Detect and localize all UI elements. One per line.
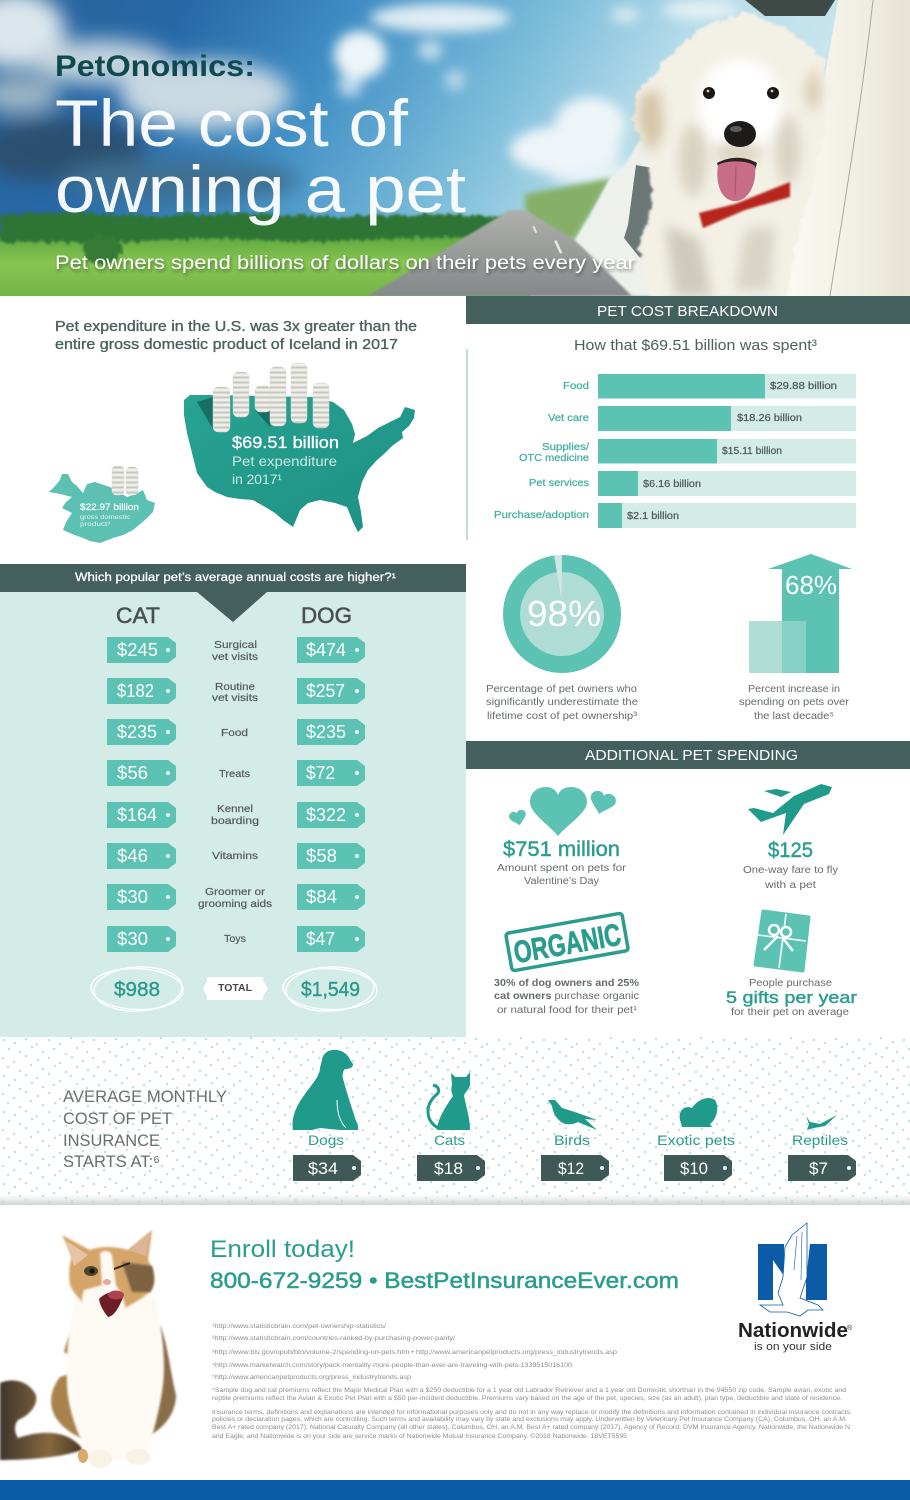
row: food: Food — [221, 727, 248, 739]
bar chart: spending by category: Pet services — [529, 477, 589, 489]
caption: 98% stat — [486, 684, 638, 722]
stat: flight fare: $125 — [768, 839, 813, 862]
row: routine vet visits: vet visits — [212, 692, 258, 704]
Iceland map with coins: product³ — [80, 522, 110, 528]
stat: gifts per year: for their pet on average — [731, 1007, 849, 1018]
item: birds: $12 — [558, 1159, 584, 1178]
footnotes: and Eagle, and Nationwide is on your side are service marks of Nationwide Mutual Insurance Company. ©2018 Nationwide. 18VET5595 — [212, 1433, 628, 1440]
total label — [203, 977, 268, 1000]
hero landscape — [0, 178, 650, 296]
donut chart: 98% underestimate — [503, 555, 621, 673]
row: surgical vet visits: Surgical — [214, 639, 257, 651]
hero title — [55, 86, 466, 226]
heading: average monthly cost: STARTS AT:⁶ — [63, 1153, 160, 1171]
footnotes: Best A+ rated company (2017); National Casualty Company (all other states), Columbus, OH, an A.M. Best A+ rated company (2017). Agency of Record: DVM Insurance Agency. Nationwide, the Nationwide N — [212, 1424, 850, 1431]
hero photo: dog in car window on a country road — [0, 0, 910, 296]
row: grooming aids: grooming aids — [198, 898, 272, 910]
footnotes: ⁴http://www.marketwatch.com/story/pack-mentality-more-people-than-ever-are-traveling-with-pets-1339515016100 — [212, 1362, 573, 1369]
total: dog — [282, 965, 378, 1013]
subheading: how the money was spent: How that $69.51 billion was spent³ — [574, 337, 817, 354]
caption: 68% stat: spending on pets over — [739, 697, 850, 708]
stat: organic food: 30% of dog owners and 25% — [494, 978, 639, 989]
bar chart: spending by category: Purchase/adoption — [494, 509, 589, 521]
US map with coins: in 2017¹ — [232, 471, 282, 487]
row: toys: $30 — [117, 929, 148, 949]
item: cats: $18 — [434, 1159, 463, 1178]
heading: GDP comparison: Pet expenditure in the U.S. was 3x greater than the — [55, 319, 417, 335]
heading: average monthly cost — [63, 1088, 227, 1171]
row: routine vet visits: $257 — [306, 681, 345, 701]
heading: GDP comparison — [55, 319, 417, 353]
stat: gifts per year: 5 gifts per year — [726, 988, 857, 1007]
heading: average monthly cost: COST OF PET — [63, 1110, 172, 1128]
stat: flight fare: One-way fare to fly — [743, 865, 838, 876]
icon: organic stamp: ORGANIC — [511, 917, 623, 970]
row: grooming aids: $30 — [117, 887, 148, 907]
bar chart: spending by category: $6.16 billion — [643, 478, 701, 490]
item: birds: Birds — [554, 1132, 590, 1148]
Iceland map with coins: gross domestic — [80, 515, 130, 521]
footnotes: reptile premiums reflect the Avian & Exotic Pet Plan with a $50 per-incident deductible. Premiums vary based on the age of the pet, species, size (as an adult), plan type, deductible and state of residence. — [212, 1395, 842, 1402]
Iceland map with coins: $22.97 billion — [80, 502, 139, 512]
footnotes: ⁶Sample dog and cat premiums reflect the Major Medical Plan with a $250 deductible for a 1 year old Labrador Retriever and a 1 year old Domestic shorthair in the 94550 zip code. Sample avian, exotic and — [212, 1387, 847, 1394]
icon: gift box — [755, 911, 809, 971]
call to action: enroll — [210, 1236, 679, 1293]
arrow chart: 68% increase — [749, 554, 852, 673]
row: vitamins: $46 — [117, 846, 148, 866]
photo: calico cat — [0, 1230, 176, 1468]
row: kennel boarding: $164 — [117, 805, 157, 825]
donut chart: 98% underestimate: 98% — [527, 593, 601, 634]
stat: organic food — [494, 978, 639, 1016]
row: food — [107, 719, 365, 745]
row: treats: $56 — [117, 763, 148, 783]
bar chart: spending by category — [494, 374, 856, 528]
row: kennel boarding: $322 — [306, 805, 346, 825]
row: vitamins: $58 — [306, 846, 337, 866]
bar chart: spending by category: $18.26 billion — [737, 412, 802, 424]
call to action: enroll: Enroll today! — [210, 1236, 355, 1263]
row: treats: $72 — [306, 763, 335, 783]
row: routine vet visits — [107, 678, 365, 704]
item: dogs: Dogs — [308, 1132, 344, 1148]
item: reptiles — [788, 1115, 856, 1181]
total label: TOTAL — [218, 982, 253, 994]
row: grooming aids: Groomer or — [205, 886, 266, 898]
caption: 98% stat: significantly underestimate the — [486, 697, 638, 708]
header: additional pet spending: ADDITIONAL PET SPENDING — [585, 748, 798, 764]
footnotes: ²http://www.statisticbrain.com/countries-ranked-by-purchasing-power-parity/ — [212, 1335, 455, 1342]
arrow chart: 68% increase: 68% — [785, 570, 837, 600]
row: surgical vet visits: vet visits — [212, 651, 258, 663]
row: routine vet visits: $182 — [117, 681, 154, 701]
hero subtitle: Pet owners spend billions of dollars on their pets every year — [55, 253, 636, 274]
bar chart: spending by category: Food — [563, 380, 589, 392]
row: kennel boarding — [107, 802, 365, 828]
US map with coins: Pet expenditure — [232, 453, 337, 469]
row: toys — [107, 926, 365, 952]
icon: airplane — [748, 784, 832, 835]
footnotes: policies or declaration pages, which are controlling. Such terms and availability may vary by state and exclusions may apply. Underwritten by Veterinary Pet Insurance Company (CA), Columbus, OH, an A.M. — [212, 1416, 847, 1423]
bar chart: spending by category: $2.1 billion — [627, 510, 679, 522]
heading: GDP comparison: entire gross domestic product of Iceland in 2017 — [55, 337, 398, 353]
call to action: enroll: 800-672-9259 • BestPetInsuranceEver.com — [210, 1268, 679, 1293]
footnotes: ³http://www.bls.gov/opub/btn/volume-2/spending-on-pets.htm • http://www.americanpetproducts.org/press_industrytrends.asp — [212, 1349, 618, 1356]
stat: gifts per year: People purchase — [749, 978, 832, 989]
hero clouds — [0, 0, 738, 202]
row: treats — [107, 760, 365, 786]
US map with coins: $69.51 billion — [232, 434, 339, 452]
caption: 98% stat: Percentage of pet owners who — [486, 684, 637, 695]
heading: average monthly cost: INSURANCE — [63, 1132, 160, 1150]
hero eyebrow: PetOnomics: PetOnomics: — [55, 50, 255, 83]
stat: valentine's day: Amount spent on pets for — [497, 863, 627, 874]
hero title: The cost of — [55, 86, 409, 160]
footnotes — [212, 1323, 852, 1440]
stat: flight fare — [743, 839, 838, 891]
header: which pet costs more: Which popular pet’s average annual costs are higher?¹ — [75, 572, 396, 584]
item: exotic pets: Exotic pets — [657, 1132, 735, 1148]
header: pet cost breakdown — [466, 296, 910, 324]
stat: valentine's day: Valentine’s Day — [524, 876, 599, 887]
column heading: cat: CAT — [116, 603, 160, 628]
hero dog — [632, 12, 825, 296]
item: exotic pets: $10 — [680, 1159, 708, 1178]
hero title: owning a pet — [55, 152, 466, 226]
panel: Iceland comparison — [49, 319, 417, 543]
row: food: $235 — [306, 722, 346, 742]
row: vitamins — [107, 843, 365, 869]
hero car — [575, 0, 910, 296]
total: cat — [90, 965, 184, 1013]
bar chart: spending by category: $15.11 billion — [722, 445, 782, 457]
US map with coins — [184, 363, 415, 532]
caption: 68% stat — [739, 684, 850, 722]
header: pet cost breakdown: PET COST BREAKDOWN — [597, 304, 778, 320]
heading: average monthly cost: AVERAGE MONTHLY — [63, 1088, 227, 1106]
total: dog: $1,549 — [301, 979, 360, 1001]
row: routine vet visits: Routine — [215, 681, 255, 693]
stat: valentine's day: $751 million — [503, 838, 620, 861]
logo: Nationwide: ® — [847, 1324, 853, 1332]
header: additional pet spending — [466, 741, 910, 769]
item: cats — [417, 1072, 485, 1181]
row: surgical vet visits — [107, 637, 365, 663]
row: kennel boarding: Kennel — [217, 803, 253, 815]
stat: organic food: cat owners purchase organic — [494, 991, 639, 1002]
stat: gifts per year — [726, 978, 857, 1018]
panel: pet insurance monthly cost — [0, 1037, 910, 1205]
bar chart: spending by category: $29.88 billion — [770, 380, 837, 392]
logo: Nationwide: is on your side — [754, 1341, 832, 1353]
item: reptiles: $7 — [809, 1159, 828, 1178]
footnotes: Insurance terms, definitions and explanations are intended for informational purposes only and do not in any way replace or modify the definitions and information contained in individual insurance contracts, — [212, 1409, 852, 1416]
panel: pet cost breakdown — [466, 296, 910, 528]
panel: cat vs dog annual costs — [0, 564, 466, 1037]
item: dogs: $34 — [308, 1159, 338, 1178]
footer band — [0, 1480, 910, 1500]
row: treats: Treats — [219, 768, 250, 780]
stat: flight fare: with a pet — [764, 880, 816, 891]
bar chart: spending by category: Vet care — [548, 412, 589, 424]
logo: Nationwide — [738, 1223, 853, 1353]
row: toys: Toys — [224, 933, 246, 945]
row: food: $235 — [117, 722, 157, 742]
row: grooming aids: $84 — [306, 887, 337, 907]
total: cat: $988 — [114, 979, 160, 1001]
logo: Nationwide: Nationwide — [738, 1320, 848, 1342]
row: kennel boarding: boarding — [211, 815, 259, 827]
stat: valentine's day — [497, 838, 627, 887]
item: reptiles: Reptiles — [792, 1132, 848, 1148]
item: birds — [541, 1100, 609, 1181]
caption: 68% stat: Percent increase in — [748, 684, 840, 695]
header: which pet costs more — [0, 564, 466, 622]
row: grooming aids — [107, 884, 365, 910]
panel: additional pet spending — [466, 741, 910, 1018]
row: toys: $47 — [306, 929, 335, 949]
item: dogs — [293, 1050, 361, 1181]
caption: 68% stat: the last decade⁵ — [754, 711, 834, 722]
footnotes: ⁵http://www.americanpetproducts.org/press_industrytrends.asp — [212, 1374, 412, 1381]
bar chart: spending by category: OTC medicine — [519, 452, 589, 464]
item: cats: Cats — [434, 1132, 465, 1148]
footnotes: ¹http://www.statisticbrain.com/pet-ownership-statistics/ — [212, 1323, 386, 1330]
row: vitamins: Vitamins — [212, 850, 258, 862]
item: exotic pets — [657, 1098, 735, 1181]
row: surgical vet visits: $245 — [117, 640, 158, 660]
caption: 98% stat: lifetime cost of pet ownership³ — [487, 711, 638, 722]
bar chart: spending by category: Supplies/ — [542, 441, 589, 453]
stat: organic food: or natural food for their pet¹ — [497, 1005, 638, 1016]
icon: hearts — [508, 787, 617, 836]
row: surgical vet visits: $474 — [306, 640, 346, 660]
column heading: dog: DOG — [301, 603, 352, 628]
Iceland map with coins — [49, 466, 155, 543]
